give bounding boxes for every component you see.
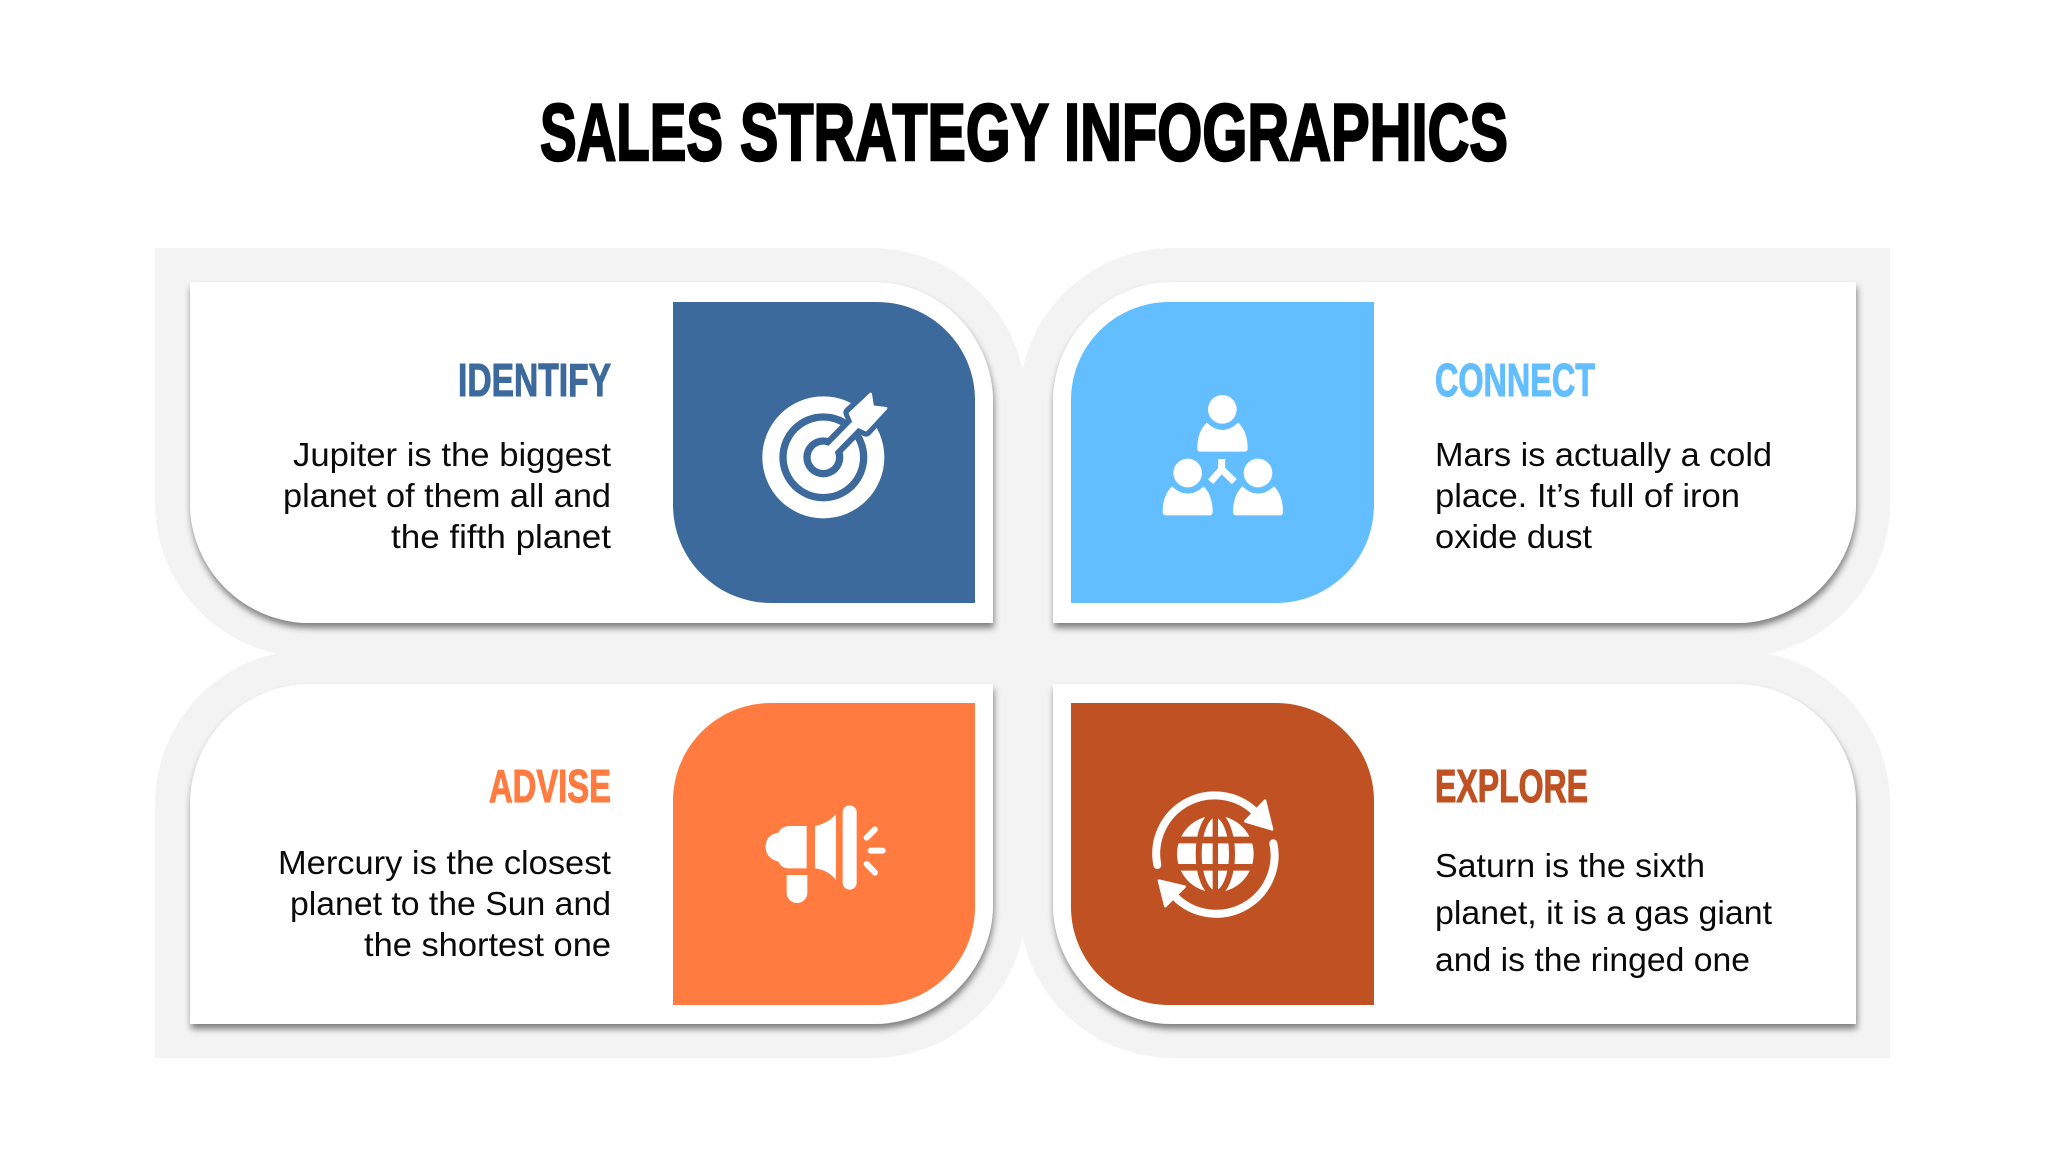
title: STRATEGY [740, 88, 1049, 178]
text: advise: planet to the Sun and [290, 885, 611, 922]
card: identify [190, 282, 993, 623]
panel: connect [1053, 282, 1856, 623]
text: identify: planet of them all and [283, 477, 611, 514]
text: connect [1435, 436, 1772, 555]
panel: explore [1053, 684, 1856, 1024]
color block: connect [1071, 302, 1374, 603]
icon: target with arrow [762, 393, 887, 518]
text: connect: place. It’s full of iron [1435, 477, 1740, 514]
color block: identify [673, 302, 975, 603]
text: connect: oxide dust [1435, 518, 1592, 555]
text: explore: Saturn is the sixth [1435, 847, 1705, 884]
heading: explore: EXPLORE [1435, 760, 1588, 812]
text: explore [1435, 847, 1772, 978]
title: INFOGRAPHICS [1064, 88, 1508, 178]
icon: globe with rotating arrows [1156, 795, 1275, 914]
color block: explore [1071, 703, 1374, 1005]
heading: advise: ADVISE [489, 760, 611, 812]
text: connect: Mars is actually a cold [1435, 436, 1772, 473]
background halo [155, 248, 1890, 1058]
card: connect [1053, 282, 1856, 623]
text: identify: the fifth planet [391, 518, 611, 555]
icon: megaphone [766, 805, 883, 903]
text: explore: planet, it is a gas giant [1435, 894, 1772, 931]
text: identify [283, 436, 611, 555]
panel: identify [190, 282, 993, 623]
icon: people network [1163, 395, 1283, 515]
text: advise: Mercury is the closest [278, 844, 611, 881]
card: advise [190, 684, 993, 1024]
card: explore [1053, 684, 1856, 1024]
color block: advise [673, 703, 975, 1005]
text: advise [278, 844, 611, 963]
heading: identify: IDENTIFY [458, 354, 611, 406]
text: explore: and is the ringed one [1435, 941, 1750, 978]
title: SALES [540, 88, 723, 178]
panel: advise [190, 684, 993, 1024]
heading: connect: CONNECT [1435, 354, 1595, 406]
title [540, 88, 1508, 178]
text: advise: the shortest one [364, 926, 611, 963]
text: identify: Jupiter is the biggest [293, 436, 611, 473]
